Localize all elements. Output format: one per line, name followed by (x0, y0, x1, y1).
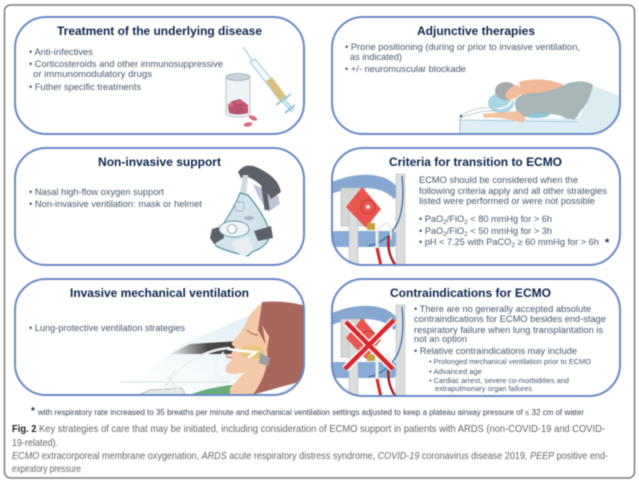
criteria list: * (605, 237, 610, 249)
illustration: prone patient (460, 79, 625, 136)
treatment list: • Futher specific treatments (29, 82, 141, 93)
figure caption: ECMO extracorporeal membrane oxygenation, ARDS acute respiratory distress syndrome, COVID-19 coronavirus disease 2019, PEEP positive end- (12, 451, 608, 462)
illustration: ECMO device (332, 174, 405, 268)
icon: red cross (345, 320, 394, 369)
icon: pill jar (226, 74, 258, 128)
contraindications text (414, 304, 606, 357)
relative contraindications list: • Cardiac arrest, severe co-morbidities and (429, 376, 569, 385)
contraindications text: contraindications for ECMO besides end-stage (414, 314, 606, 325)
figure caption: expiratory pressure (12, 464, 81, 475)
support list (29, 187, 202, 210)
figure caption: Fig. 2 Key strategies of care that may be initiated, including consideration of ECMO support in patients with ARDS (non-COVID-19 and COVID- (12, 424, 605, 435)
criteria list: • PaO (419, 226, 443, 236)
relative contraindications list: • Advanced age (429, 367, 482, 376)
support list: • Nasal high-flow oxygen support (29, 187, 164, 198)
heading: Adjunctive therapies (417, 24, 535, 38)
criteria list: /FiO (447, 214, 464, 224)
panel: invasive mechanical ventilation (15, 279, 306, 396)
therapies list: • Prone positioning (during or prior to invasive ventilation, (345, 42, 580, 53)
panel background (332, 148, 620, 265)
criteria introduction: following criteria apply and all other strategies (419, 186, 607, 197)
panel: contraindications for ECMO (332, 279, 620, 399)
relative contraindications list (429, 357, 591, 393)
criteria list: • PaO (419, 214, 443, 224)
heading: Criteria for transition to ECMO (389, 155, 562, 169)
contraindications text: • There are no generally accepted absolute (414, 304, 591, 315)
panel background (15, 279, 304, 395)
relative contraindications list: extrapulmonary organ failures (435, 384, 532, 393)
treatment list (29, 47, 223, 93)
panel: non-invasive support (15, 148, 304, 265)
therapies list (345, 42, 580, 75)
panel outline (332, 17, 620, 134)
illustration: intubated patient (118, 302, 306, 396)
illustration: ECMO device crossed out (332, 305, 405, 399)
footnote: * (31, 406, 35, 417)
treatment list: • Corticosteroids and other immunosuppressive (29, 59, 223, 70)
panel outline (15, 279, 304, 395)
criteria introduction: listed were performed or were not possible (419, 196, 595, 207)
figure caption: 19-related). (12, 438, 58, 449)
footnote: with respiratory rate increased to 35 breaths per minute and mechanical ventilation settings adjusted to keep a plateau airway pressure of ≤ 32 cm of water (37, 408, 584, 417)
criteria list: < 80 mmHg for > 6h (468, 214, 552, 224)
contraindications text: not an option (414, 334, 467, 345)
panel outline (15, 148, 304, 265)
criteria list: 2 (443, 219, 447, 226)
criteria introduction (419, 175, 607, 207)
criteria list: • pH < 7.25 with PaCO (419, 237, 511, 247)
panel: treatment of the underlying disease (15, 17, 304, 134)
criteria list: < 50 mmHg for > 3h (468, 226, 552, 236)
panel background (332, 17, 620, 134)
ventilation list: • Lung-protective ventilation strategies (29, 323, 185, 334)
panel outline (15, 17, 304, 134)
panel outline (332, 279, 620, 396)
treatment list: • Anti-infectives (29, 47, 93, 58)
criteria list: 2 (464, 219, 468, 226)
heading: Contraindications for ECMO (390, 286, 551, 300)
criteria list: 2 (443, 231, 447, 238)
criteria list: ≥ 60 mmHg for > 6h (515, 237, 599, 247)
figure caption (12, 424, 608, 475)
heading: Treatment of the underlying disease (57, 24, 262, 38)
panel: adjunctive therapies (332, 17, 625, 136)
treatment list: or immunomodulatory drugs (33, 69, 152, 80)
relative contraindications list: • Prolonged mechanical ventilation prior to ECMO (429, 357, 591, 366)
heading: Non-invasive support (98, 155, 221, 169)
icon: ventilation mask (210, 165, 281, 257)
contraindications text: respiratory failure when lung transplantation is (414, 325, 603, 336)
heading: Invasive mechanical ventilation (70, 286, 249, 300)
contraindications text: • Relative contraindications may include (414, 346, 577, 357)
panel: criteria for transition to ECMO (332, 148, 620, 268)
criteria list: /FiO (447, 226, 464, 236)
therapies list: as indicated) (350, 52, 402, 63)
panel outline (332, 148, 620, 265)
panel background (332, 279, 620, 396)
therapies list: • +/- neuromuscular blockade (345, 64, 466, 75)
criteria list: 2 (464, 231, 468, 238)
icon: syringe (243, 47, 295, 113)
criteria introduction: ECMO should be considered when the (419, 175, 578, 186)
criteria list: 2 (511, 242, 515, 249)
support list: • Non-invasive ventilation: mask or helmet (29, 199, 202, 210)
criteria list (419, 214, 610, 249)
